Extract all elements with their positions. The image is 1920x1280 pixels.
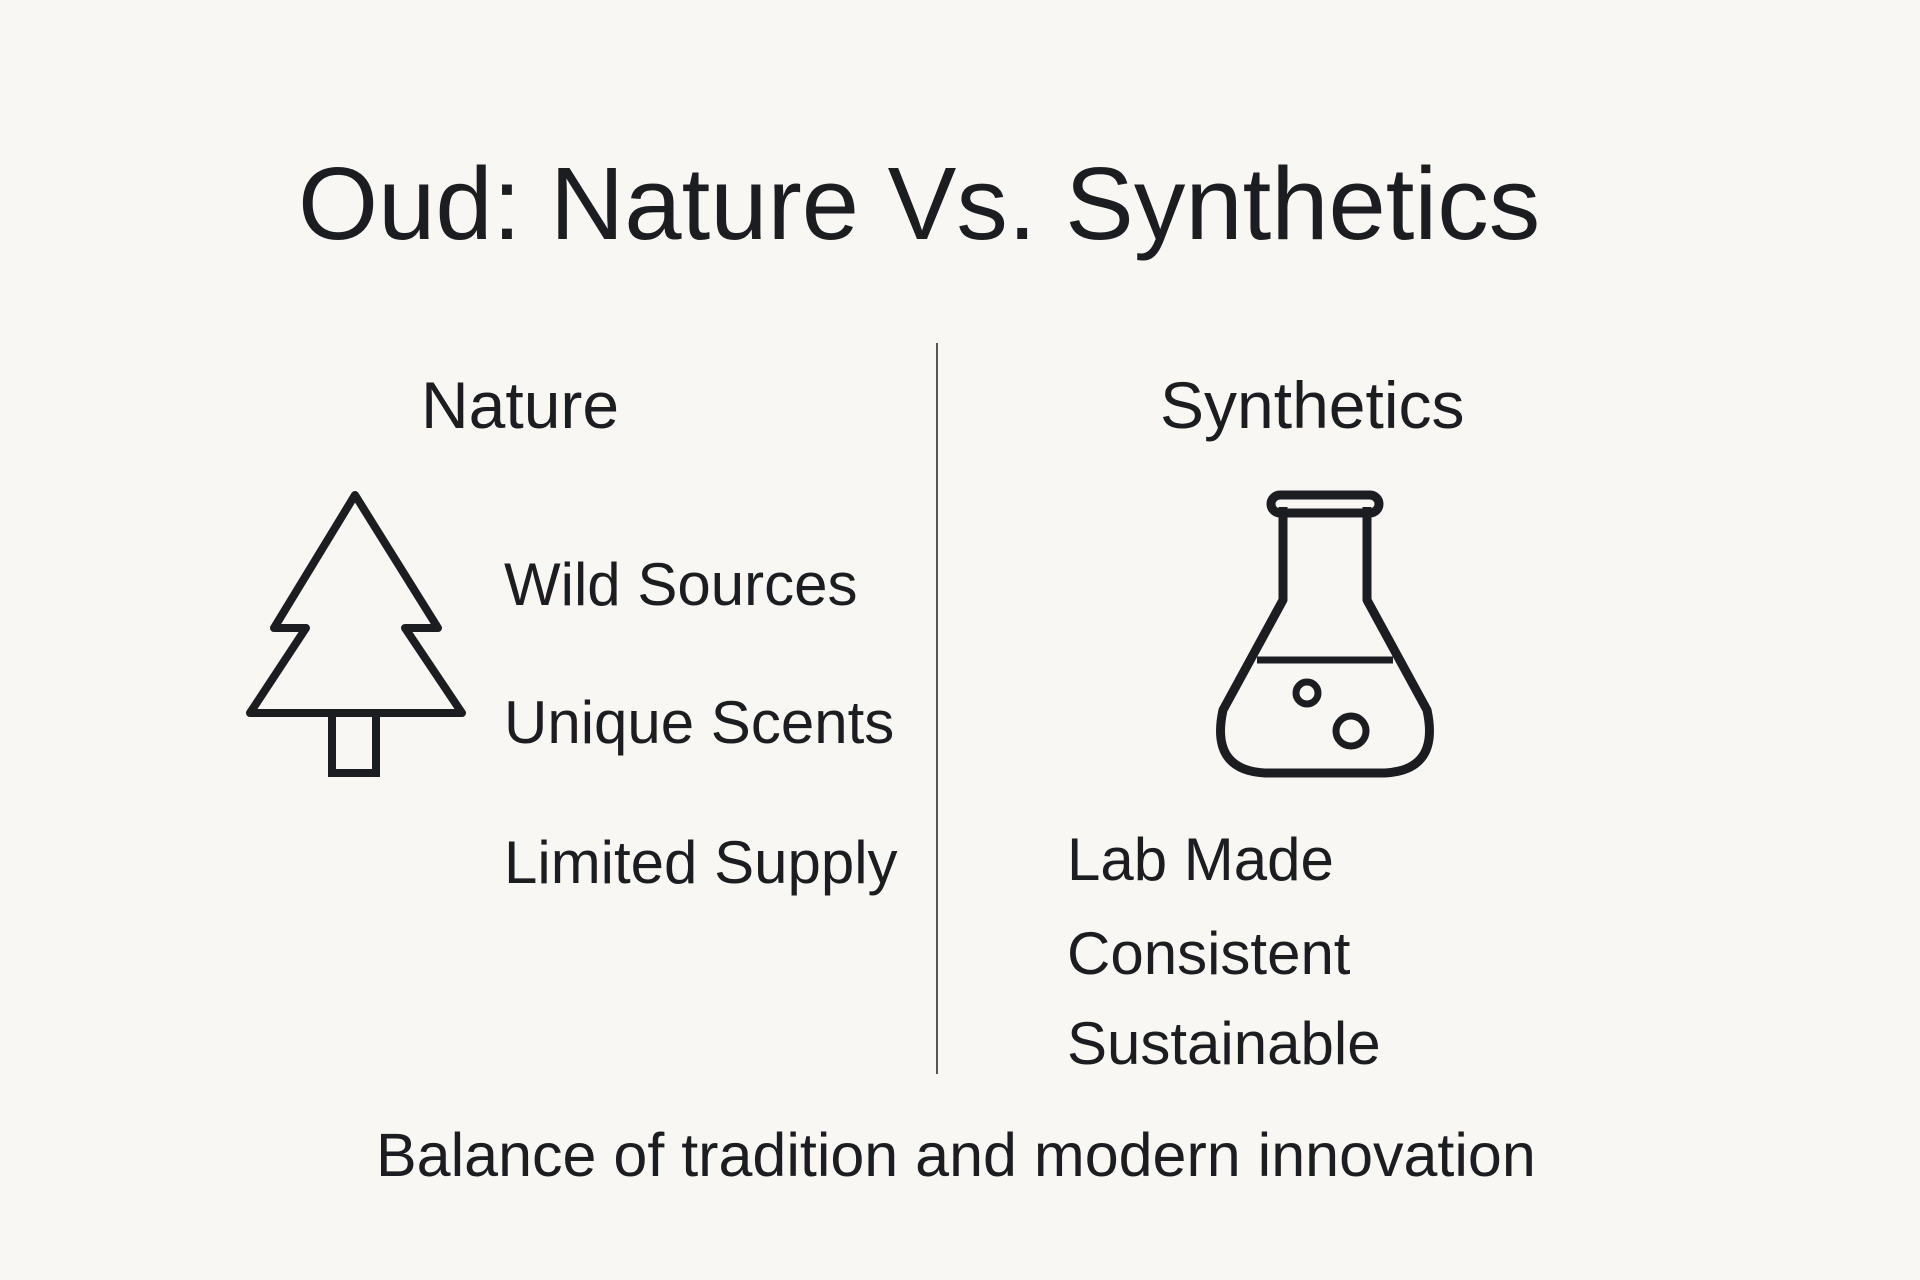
item: unique scents: Unique Scents xyxy=(504,689,894,756)
heading: nature: Nature xyxy=(421,368,619,442)
panel: nature list xyxy=(504,551,898,896)
title: Oud: Nature Vs. Synthetics xyxy=(298,146,1540,261)
item: limited supply: Limited Supply xyxy=(504,829,898,896)
item: lab made: Lab Made xyxy=(1067,826,1334,893)
item: wild sources: Wild Sources xyxy=(504,551,857,618)
panel: synthetics list xyxy=(1067,826,1381,1077)
heading: synthetics: Synthetics xyxy=(1160,368,1464,442)
icon: tree xyxy=(246,491,466,777)
item: consistent: Consistent xyxy=(1067,920,1350,987)
icon: flask xyxy=(1216,490,1434,778)
item: sustainable: Sustainable xyxy=(1067,1010,1381,1077)
divider xyxy=(936,343,938,1074)
footer caption: Balance of tradition and modern innovation xyxy=(376,1121,1536,1189)
